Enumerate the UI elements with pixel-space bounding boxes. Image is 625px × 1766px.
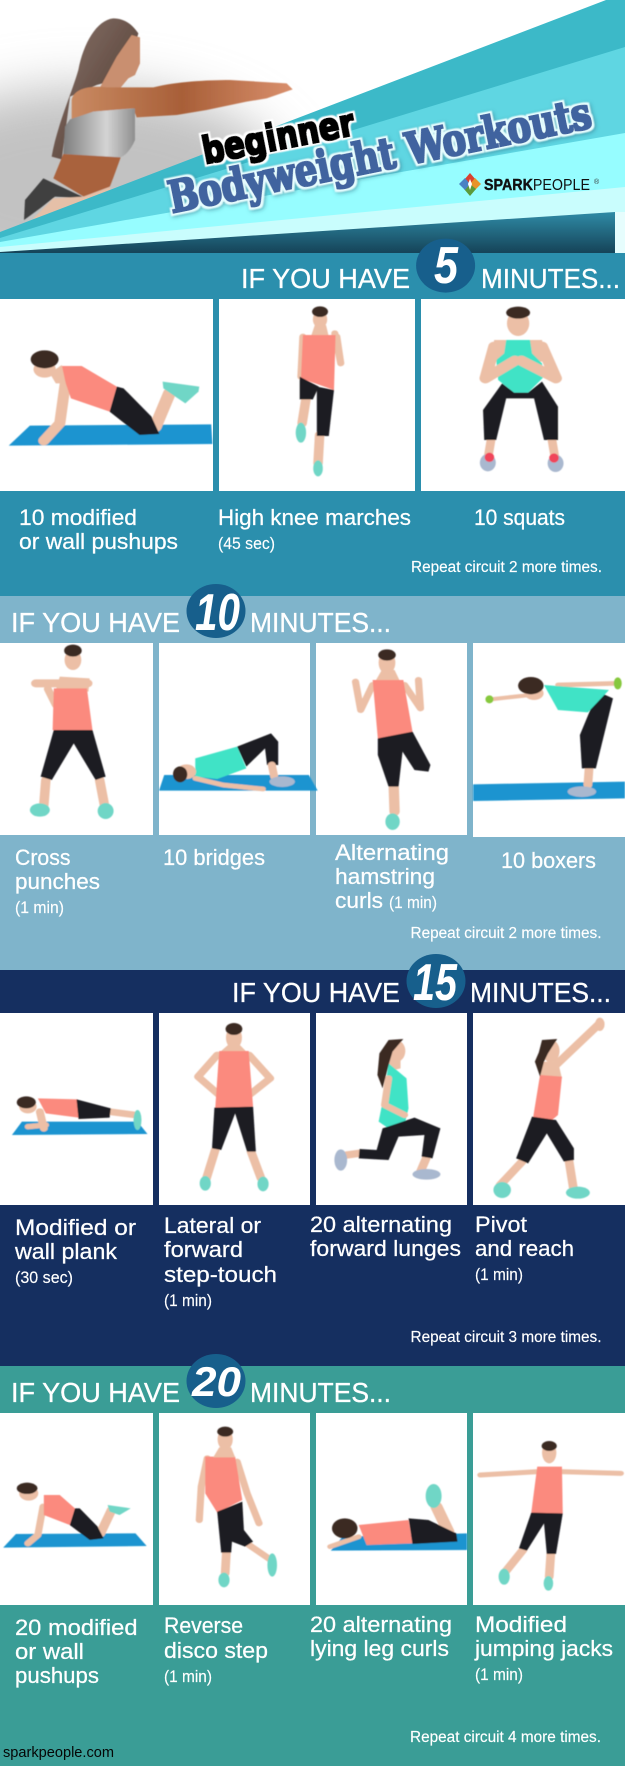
text: 20 alternating lying leg curls bbox=[310, 1612, 452, 1661]
heading: if you have 5 minutes bbox=[241, 237, 620, 295]
text: pivot and reach: and reach bbox=[475, 1236, 574, 1261]
text: 20 modified or wall pushups bbox=[15, 1615, 138, 1688]
heading: if you have 20 minutes: IF YOU HAVE bbox=[11, 1377, 180, 1408]
text: high knee marches bbox=[218, 505, 411, 553]
exercise photo cards bbox=[0, 1013, 625, 1205]
text: modified or wall plank: Modified or bbox=[15, 1215, 137, 1240]
logo: SparkPeople bbox=[459, 173, 600, 196]
text: modified or wall plank: (30 sec) bbox=[15, 1268, 73, 1287]
text: modified jumping jacks: jumping jacks bbox=[474, 1636, 613, 1661]
text: lateral or forward step-touch: (1 min) bbox=[164, 1291, 212, 1310]
text: reverse disco step: (1 min) bbox=[164, 1667, 212, 1686]
text: reverse disco step: Reverse bbox=[164, 1613, 243, 1638]
text: lateral or forward step-touch bbox=[164, 1213, 277, 1310]
heading: if you have 20 minutes: MINUTES... bbox=[250, 1377, 391, 1408]
text: alternating hamstring curls: hamstring bbox=[335, 864, 435, 889]
text: 20 alternating forward lunges: 20 alternating bbox=[310, 1212, 452, 1237]
logo: SparkPeople: ® bbox=[594, 178, 600, 186]
text: 10 bridges: 10 bridges bbox=[163, 845, 265, 870]
footer: sparkpeople.com: sparkpeople.com bbox=[3, 1745, 114, 1761]
text: 20 alternating forward lunges: forward lunges bbox=[310, 1236, 461, 1261]
text: high knee marches: High knee marches bbox=[218, 505, 411, 530]
text: 10 modified or wall pushups bbox=[19, 505, 178, 554]
text: 20 alternating lying leg curls: 20 alternating bbox=[310, 1612, 452, 1637]
figure: bridge bbox=[159, 733, 318, 791]
figure: modified pushup bbox=[9, 350, 212, 446]
text: 20 modified or wall pushups: or wall bbox=[15, 1639, 84, 1664]
figure: plank bbox=[12, 1096, 147, 1135]
figure: reverse disco step bbox=[199, 1427, 277, 1587]
text: repeat circuit: Repeat circuit 2 more times. bbox=[410, 925, 602, 942]
heading: if you have 10 minutes: MINUTES... bbox=[250, 607, 391, 638]
panel: title header bbox=[0, 0, 625, 287]
exercise photo cards bbox=[0, 1413, 625, 1605]
panel: 20 minutes bbox=[0, 1354, 625, 1766]
figure: cross punch bbox=[30, 645, 114, 819]
text: repeat circuit: Repeat circuit 2 more times. bbox=[411, 559, 602, 576]
exercise photo cards bbox=[0, 299, 625, 491]
heading: if you have 15 minutes: MINUTES... bbox=[470, 977, 611, 1008]
text: 10 boxers: 10 boxers bbox=[501, 848, 596, 873]
figure: step-touch bbox=[198, 1023, 270, 1191]
figure: forward lunge bbox=[334, 1039, 440, 1180]
text: alternating hamstring curls: curls bbox=[335, 888, 383, 913]
heading: if you have 20 minutes bbox=[11, 1354, 391, 1408]
figure: modified jumping jack bbox=[480, 1441, 621, 1591]
heading: if you have 15 minutes bbox=[232, 954, 611, 1012]
text: cross punches: punches bbox=[15, 869, 100, 894]
text: pivot and reach bbox=[475, 1212, 574, 1284]
figure: boxers with dumbbells bbox=[473, 677, 625, 801]
text: alternating hamstring curls: (1 min) bbox=[389, 893, 437, 912]
text: pivot and reach: (1 min) bbox=[475, 1265, 523, 1284]
text: pivot and reach: Pivot bbox=[475, 1212, 528, 1237]
text: 20 alternating forward lunges bbox=[310, 1212, 461, 1261]
text: repeat circuit: Repeat circuit 4 more times. bbox=[410, 1729, 601, 1746]
text: modified or wall plank bbox=[14, 1215, 137, 1287]
text: 10 squats: 10 squats bbox=[474, 505, 565, 530]
text: reverse disco step: disco step bbox=[164, 1638, 268, 1663]
heading: if you have 10 minutes: 10 bbox=[195, 584, 240, 642]
figure: modified pushup bbox=[3, 1483, 147, 1548]
heading: if you have 5 minutes: IF YOU HAVE bbox=[241, 263, 410, 294]
heading: if you have 20 minutes: 20 bbox=[191, 1358, 241, 1405]
heading: if you have 10 minutes: IF YOU HAVE bbox=[11, 607, 180, 638]
heading: beginner: beginner bbox=[199, 101, 358, 173]
logo: SparkPeople: SPARKPEOPLE bbox=[484, 177, 590, 194]
text: high knee marches: (45 sec) bbox=[218, 534, 275, 553]
text: modified or wall plank: wall plank bbox=[14, 1239, 118, 1264]
exercise photo cards bbox=[0, 643, 625, 837]
text: cross punches: Cross bbox=[15, 845, 70, 870]
figure: squat bbox=[480, 307, 564, 472]
text: modified jumping jacks bbox=[474, 1612, 613, 1684]
heading: if you have 5 minutes: 5 bbox=[434, 237, 459, 295]
text: cross punches: (1 min) bbox=[15, 898, 64, 917]
heading: if you have 15 minutes: 15 bbox=[413, 954, 458, 1012]
text: alternating hamstring curls: Alternating bbox=[335, 840, 449, 865]
text: modified jumping jacks: Modified bbox=[475, 1612, 567, 1637]
text: 10 modified or wall pushups: or wall pushups bbox=[19, 529, 178, 554]
figure: pivot and reach bbox=[493, 1018, 605, 1199]
diagonal stripes bbox=[0, 0, 625, 253]
panel: 5 minutes bbox=[0, 237, 625, 596]
text: cross punches bbox=[15, 845, 100, 917]
photo: woman squatting with arms extended bbox=[0, 18, 293, 287]
panel: 15 minutes bbox=[0, 954, 625, 1366]
text: alternating hamstring curls bbox=[335, 840, 449, 913]
figure: high knee march bbox=[296, 306, 341, 476]
text: repeat circuit: Repeat circuit 3 more times. bbox=[410, 1329, 602, 1346]
text: lateral or forward step-touch: step-touch bbox=[164, 1262, 277, 1287]
text: 10 modified or wall pushups: 10 modified bbox=[19, 505, 137, 530]
heading: if you have 15 minutes: IF YOU HAVE bbox=[232, 977, 400, 1008]
panel: 10 minutes bbox=[0, 584, 625, 970]
text: 20 modified or wall pushups: pushups bbox=[15, 1663, 99, 1688]
text: reverse disco step bbox=[164, 1613, 268, 1686]
text: lateral or forward step-touch: forward bbox=[164, 1237, 243, 1262]
figure: hamstring curl bbox=[356, 649, 430, 830]
text: 20 alternating lying leg curls: lying leg curls bbox=[310, 1636, 449, 1661]
text: 20 modified or wall pushups: 20 modified bbox=[15, 1615, 138, 1640]
figure: lying leg curl bbox=[330, 1484, 467, 1551]
heading: if you have 10 minutes bbox=[11, 584, 391, 642]
text: modified jumping jacks: (1 min) bbox=[475, 1665, 523, 1684]
text: lateral or forward step-touch: Lateral or bbox=[164, 1213, 262, 1238]
